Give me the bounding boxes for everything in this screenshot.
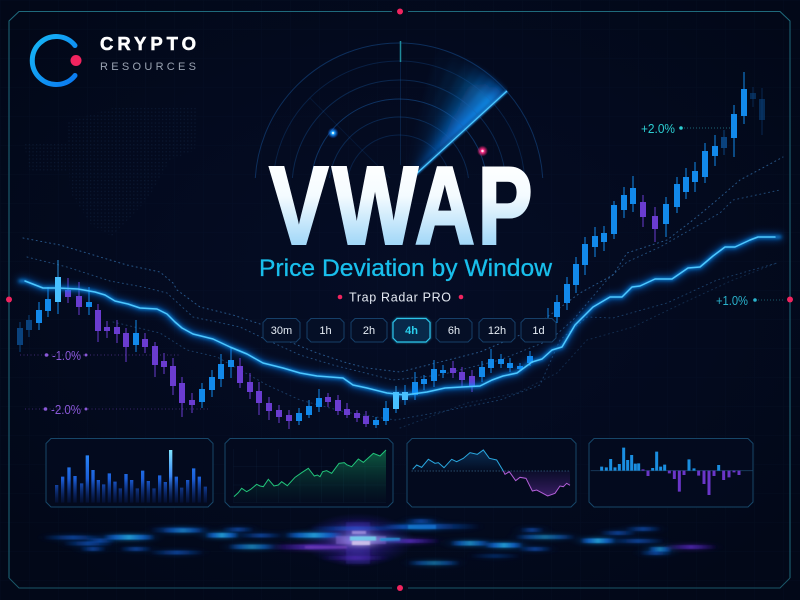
button 30m: 30m: [271, 325, 292, 337]
label -1.0%: [20, 348, 180, 363]
panel: green area chart: [225, 438, 393, 507]
radar pink blip: [477, 146, 488, 156]
title VWAP: P: [478, 143, 532, 267]
green rising line: [233, 449, 386, 503]
VWAP line: [20, 237, 780, 395]
button 1h: [307, 318, 344, 342]
title VWAP: W: [332, 145, 418, 268]
button 4h active: [393, 318, 430, 342]
button 6h: 6h: [448, 325, 460, 337]
radar sweep glow: [410, 58, 508, 170]
tagline: Trap Radar PRO: [349, 290, 451, 304]
radar blue blip: [328, 128, 338, 138]
candlestick chart: [20, 72, 762, 429]
subtitle: Price Deviation by Window: [259, 255, 553, 282]
button 2h: 2h: [363, 325, 375, 337]
positive and negative bars: [591, 448, 753, 495]
label +1.0%: +1.0%: [716, 293, 748, 308]
button 2h: [351, 318, 387, 342]
label -2.0%: [25, 402, 210, 417]
panel: deviation histogram: [589, 438, 753, 507]
panel: volume bars: [46, 438, 213, 507]
purple candles: [68, 195, 655, 429]
logo wordmark: CRYPTO: [100, 33, 196, 54]
button 1h: 1h: [319, 325, 332, 337]
button 12h: [479, 318, 515, 342]
button 4h active: 4h: [405, 325, 418, 337]
label -1.0%: -1.0%: [52, 348, 81, 363]
logo: [32, 33, 196, 85]
label +2.0%: [641, 121, 735, 136]
world dot map: [24, 108, 197, 236]
above and below baseline line chart: [412, 450, 570, 496]
logo mark: [32, 37, 82, 85]
logo subtitle: RESOURCES: [100, 61, 196, 73]
label +2.0%: +2.0%: [641, 121, 675, 136]
button 6h: [436, 318, 472, 342]
button 1d: 1d: [532, 325, 545, 337]
candles crossing the VWAP line: [58, 260, 405, 409]
dotted deviation bands: [23, 157, 783, 428]
title VWAP: A: [415, 144, 475, 267]
volume bar chart: [57, 450, 205, 503]
title VWAP: [270, 143, 532, 268]
blue candles: [39, 72, 744, 428]
panel: deviation line: [407, 438, 576, 507]
button 1d: [521, 318, 556, 342]
title VWAP: V: [270, 145, 328, 268]
button 30m: [263, 318, 300, 342]
button 12h: 12h: [488, 325, 506, 337]
window buttons: [263, 318, 556, 342]
radar: [254, 41, 544, 178]
label -2.0%: -2.0%: [51, 402, 81, 417]
bottom heat strip: [43, 513, 717, 567]
dim candles: [20, 87, 762, 352]
label +1.0%: [716, 293, 785, 308]
